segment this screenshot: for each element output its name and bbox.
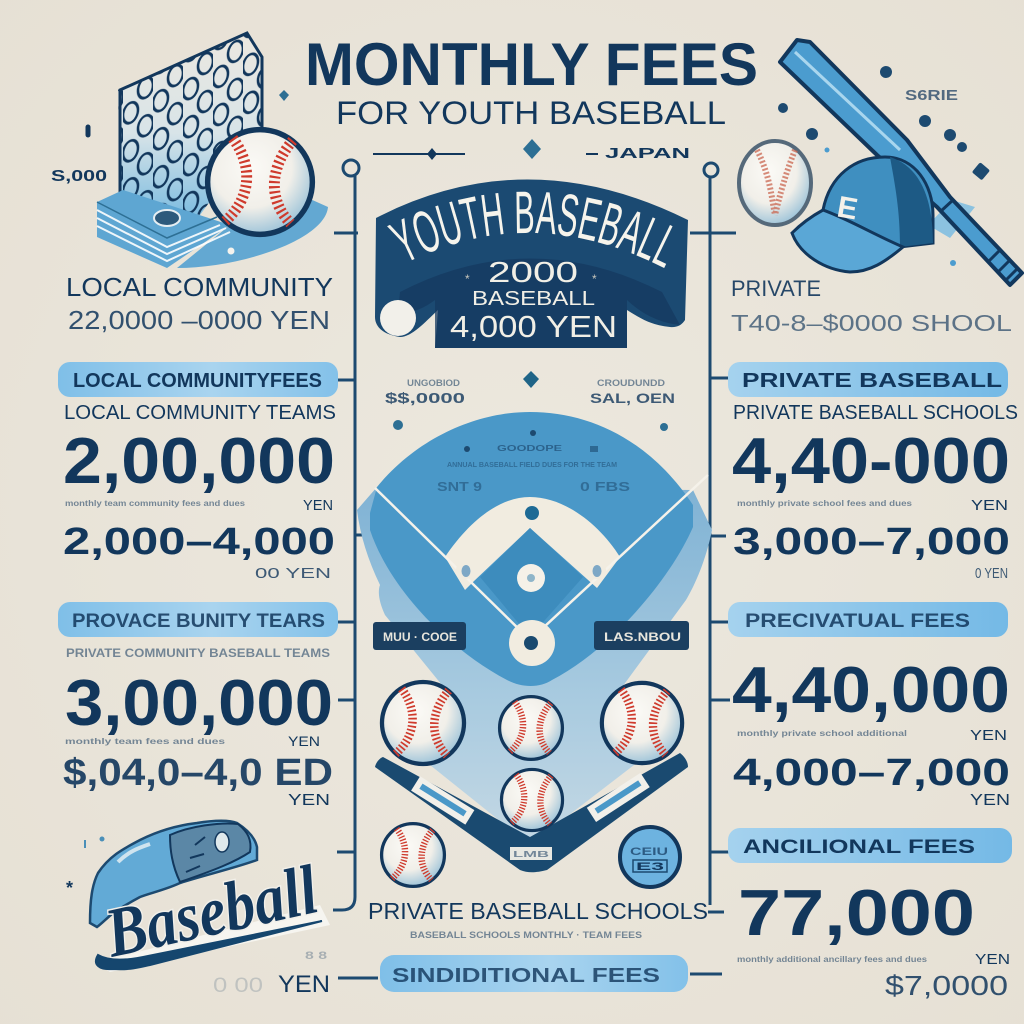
- label: left footer yen: [213, 950, 330, 998]
- panel: local community teams fees: LOCAL COMMUNITY TEAMS: [64, 402, 336, 424]
- pill: additional fees: [380, 955, 688, 992]
- pill: private community teams: PROVACE BUNITY TEARS: [72, 611, 325, 632]
- panel: ancillary amount: monthly additional ancillary fees and dues: [737, 955, 928, 964]
- pill: ancillary fees: ANCILIONAL FEES: [743, 837, 975, 858]
- label: left amount marker: S,000: [51, 168, 107, 185]
- pill: local community fees: LOCAL COMMUNITYFEES: [73, 370, 322, 392]
- field tiny labels: [437, 430, 630, 494]
- panel: private community teams fees: $,04,0–4,0 ED: [63, 752, 333, 794]
- inner diamond: [480, 528, 583, 637]
- field tiny labels: ANNUAL BASEBALL FIELD DUES FOR THE TEAM: [447, 462, 617, 469]
- panel: private baseball schools fees: 0 YEN: [975, 565, 1008, 582]
- panel: private additional amounts: 4,000–7,000: [733, 752, 1010, 794]
- label: left footer yen: 0 00: [213, 974, 263, 997]
- panel: private additional amounts: 4,40,000: [732, 653, 1010, 726]
- label: right field tag: [594, 621, 689, 650]
- label: left footer yen: 8 8: [305, 950, 327, 962]
- panel: private additional amounts: monthly private school additional: [737, 729, 907, 738]
- icon: glove swoosh with Baseball script: Baseball: [98, 851, 325, 973]
- banner: youth baseball: *: [465, 272, 470, 286]
- pill: local community fees: [58, 362, 338, 397]
- connector lines: [333, 160, 736, 978]
- plate base: [375, 753, 688, 872]
- panel: private community teams fees: PRIVATE COMMUNITY BASEBALL TEAMS: [66, 646, 330, 660]
- labels above field: [385, 371, 675, 431]
- panel: private additional amounts: YEN: [970, 727, 1007, 744]
- label: left footer yen: YEN: [278, 971, 330, 998]
- text block: private baseball schools: [368, 898, 708, 940]
- field tiny labels: SNT 9: [437, 479, 482, 494]
- banner: youth baseball: YOUTH BASEBALL: [387, 192, 672, 268]
- icon: blue badge: E3: [636, 861, 664, 873]
- panel: private community teams fees: [63, 646, 333, 809]
- infield arc: [445, 497, 620, 590]
- field tiny labels: GOODOPE: [497, 444, 563, 453]
- text block: local community: LOCAL COMMUNITY: [66, 272, 333, 302]
- chart: baseball diamond field: [357, 412, 712, 872]
- plate tickets: [411, 773, 650, 860]
- panel: private community teams fees: monthly team fees and dues: [65, 737, 226, 746]
- text block: private baseball schools: PRIVATE BASEBALL SCHOOLS: [368, 898, 708, 924]
- text block: private baseball schools: BASEBALL SCHOOLS MONTHLY · TEAM FEES: [410, 930, 642, 940]
- plate tickets: LMB: [513, 850, 549, 859]
- panel: local community teams fees: 2,000–4,000: [63, 521, 335, 563]
- panel: private baseball schools fees: PRIVATE BASEBALL SCHOOLS: [733, 402, 1018, 424]
- text block: local community: 22,0000 –0000 YEN: [68, 305, 330, 335]
- banner: youth baseball: *: [592, 272, 597, 286]
- pill: additional fees: SINDIDITIONAL FEES: [392, 965, 660, 987]
- foul lines: [375, 475, 708, 640]
- pill: private community teams: [58, 602, 338, 637]
- panel: private community teams fees: YEN: [288, 733, 320, 749]
- title: MONTHLY FEES: [305, 31, 758, 98]
- icon: net, money stack and baseball: [88, 25, 328, 268]
- panel: private community teams fees: 3,00,000: [65, 666, 333, 739]
- icons: baseballs: [382, 682, 682, 886]
- icon: glove swoosh with Baseball script: [66, 821, 330, 973]
- icon: hat, bat and ball: [739, 40, 1022, 285]
- pill: ancillary fees: [728, 828, 1012, 863]
- panel: private additional amounts: YEN: [970, 792, 1010, 809]
- panel: local community teams fees: [63, 402, 336, 582]
- base markers: [456, 506, 606, 666]
- label: left field tag: [373, 622, 466, 650]
- panel: private additional amounts: [732, 653, 1010, 809]
- subtitle ornaments and Japan label: [279, 90, 690, 162]
- icon: blue badge: [620, 827, 680, 887]
- field main: [370, 412, 693, 686]
- pill: private baseball: [728, 362, 1008, 397]
- icon: glove swoosh with Baseball script: *: [66, 878, 73, 898]
- panel: private community teams fees: YEN: [288, 792, 330, 809]
- pill: private additional fees: PRECIVATUAL FEES: [745, 611, 970, 632]
- panel: ancillary amount: [737, 876, 1010, 1001]
- pill: private additional fees: [728, 602, 1008, 637]
- banner: youth baseball: BASEBALL: [472, 288, 595, 310]
- text block: private school: T40-8–$0000 SHOOL: [731, 310, 1012, 336]
- field tiny labels: 0 FBS: [580, 479, 630, 494]
- panel: local community teams fees: 2,00,000: [63, 424, 335, 497]
- label: left field tag: MUU · COOE: [383, 630, 457, 644]
- labels above field: CROUDUNDD: [597, 378, 666, 388]
- icon: hat, bat and ball: E: [835, 190, 860, 226]
- panel: ancillary amount: 77,000: [738, 876, 975, 949]
- text block: private school: PRIVATE: [731, 276, 821, 301]
- panel: ancillary amount: YEN: [975, 951, 1010, 968]
- banner: youth baseball: 2000: [488, 257, 578, 289]
- labels above field: UNGOBIOD: [407, 378, 461, 388]
- panel: private baseball schools fees: monthly private school fees and dues: [737, 499, 913, 508]
- icon: hat, bat and ball: S6RIE: [905, 87, 958, 104]
- icon: blue badge: CEIU: [630, 846, 668, 858]
- labels above field: $$,0000: [385, 390, 465, 407]
- banner: youth baseball: 4,000 YEN: [450, 309, 617, 344]
- panel: private baseball schools fees: 3,000–7,000: [733, 521, 1010, 563]
- labels above field: SAL, OEN: [590, 390, 675, 406]
- panel: private baseball schools fees: YEN: [971, 497, 1008, 514]
- subtitle ornaments and Japan label: JAPAN: [605, 145, 690, 162]
- banner: youth baseball: [375, 180, 688, 348]
- panel: ancillary amount: $7,0000: [885, 970, 1008, 1001]
- panel: local community teams fees: monthly team community fees and dues: [65, 499, 246, 508]
- panel: local community teams fees: 00 YEN: [255, 565, 331, 582]
- panel: local community teams fees: YEN: [303, 497, 333, 514]
- text block: local community: [66, 272, 333, 335]
- title: FOR YOUTH BASEBALL: [336, 95, 726, 131]
- title: [305, 31, 758, 131]
- panel: private baseball schools fees: 4,40-000: [732, 424, 1010, 497]
- field outer base: [357, 487, 712, 845]
- text block: private school: [731, 276, 1012, 336]
- panel: private baseball schools fees: [732, 402, 1018, 582]
- label: right field tag: LAS.NBOU: [604, 630, 681, 644]
- pill: private baseball: PRIVATE BASEBALL: [742, 370, 1002, 392]
